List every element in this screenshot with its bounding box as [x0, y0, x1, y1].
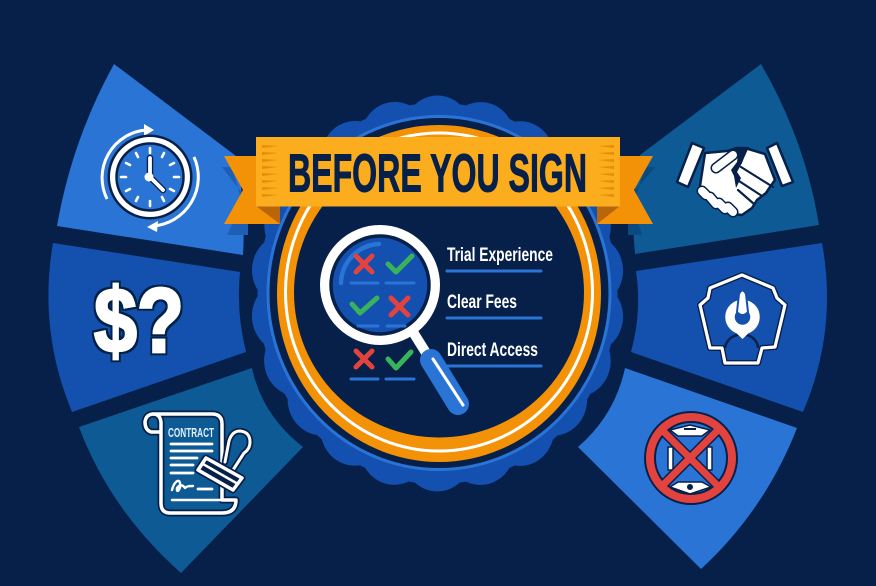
central badge [258, 103, 618, 484]
icon: dollar and question mark: $? [94, 270, 184, 372]
checklist below lens [351, 351, 414, 379]
panel: right lower, no phone [578, 368, 797, 569]
ribbon stitching [262, 145, 614, 197]
lens [325, 230, 435, 340]
ribbon tail shadows [222, 167, 248, 235]
icon: clock with circular arrows [102, 124, 198, 232]
ribbon folds [256, 206, 280, 224]
ribbon banner [222, 137, 655, 235]
title: BEFORE YOU SIGN [288, 144, 587, 204]
icon label: contract: CONTRACT [168, 426, 214, 440]
panel: left lower, contract [79, 368, 303, 573]
ribbon tails [224, 156, 280, 224]
checklist marks in lens [351, 256, 414, 326]
scalloped seal [258, 103, 618, 484]
rings [268, 116, 610, 470]
label: trial experience: Trial Experience [447, 244, 553, 266]
icon: handshake with crack [677, 143, 793, 215]
label: direct access: Direct Access [447, 339, 538, 361]
panel: right middle, direct access [631, 243, 827, 412]
icon: shield with power pin [700, 275, 785, 363]
label: clear fees: Clear Fees [447, 291, 517, 313]
checklist labels [447, 244, 553, 361]
handle [413, 332, 463, 405]
panel: left top, trial clock [57, 64, 244, 255]
magnifying glass with checklist [325, 230, 463, 405]
icon: contract and stamp [145, 414, 250, 513]
panel: right top, handshake [633, 64, 819, 254]
ribbon body [256, 137, 620, 206]
panel: left middle, fees [48, 243, 246, 412]
icon: crossed-out phone [650, 417, 732, 499]
